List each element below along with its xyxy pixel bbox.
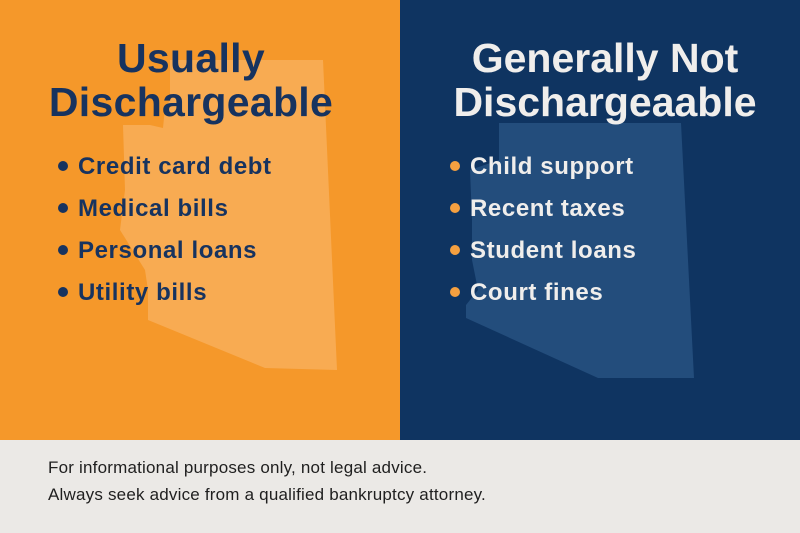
list right (450, 153, 636, 306)
list right: Student loans (470, 237, 636, 264)
heading right: Dischargeaable (453, 79, 757, 125)
footer disclaimer: Always seek advice from a qualified bankruptcy attorney. (48, 485, 486, 504)
heading left: Usually (117, 35, 265, 81)
list left: Personal loans (78, 237, 257, 264)
list left: Medical bills (78, 195, 229, 222)
panel: usually dischargeable (0, 0, 400, 440)
list left: Credit card debt (78, 153, 272, 180)
heading right (453, 35, 757, 125)
panel: generally not dischargeable (400, 0, 800, 440)
icon: arizona map right (466, 123, 694, 378)
list right: Court fines (470, 279, 603, 306)
list left: Utility bills (78, 279, 207, 306)
footer disclaimer: For informational purposes only, not legal advice. (48, 458, 427, 477)
footer disclaimer (0, 440, 800, 533)
heading left: Dischargeable (49, 79, 333, 125)
heading right: Generally Not (472, 35, 738, 81)
icon: arizona map left (120, 60, 337, 370)
list left (58, 153, 272, 306)
list right: Recent taxes (470, 195, 625, 222)
list right: Child support (470, 153, 634, 180)
heading left (49, 35, 333, 125)
